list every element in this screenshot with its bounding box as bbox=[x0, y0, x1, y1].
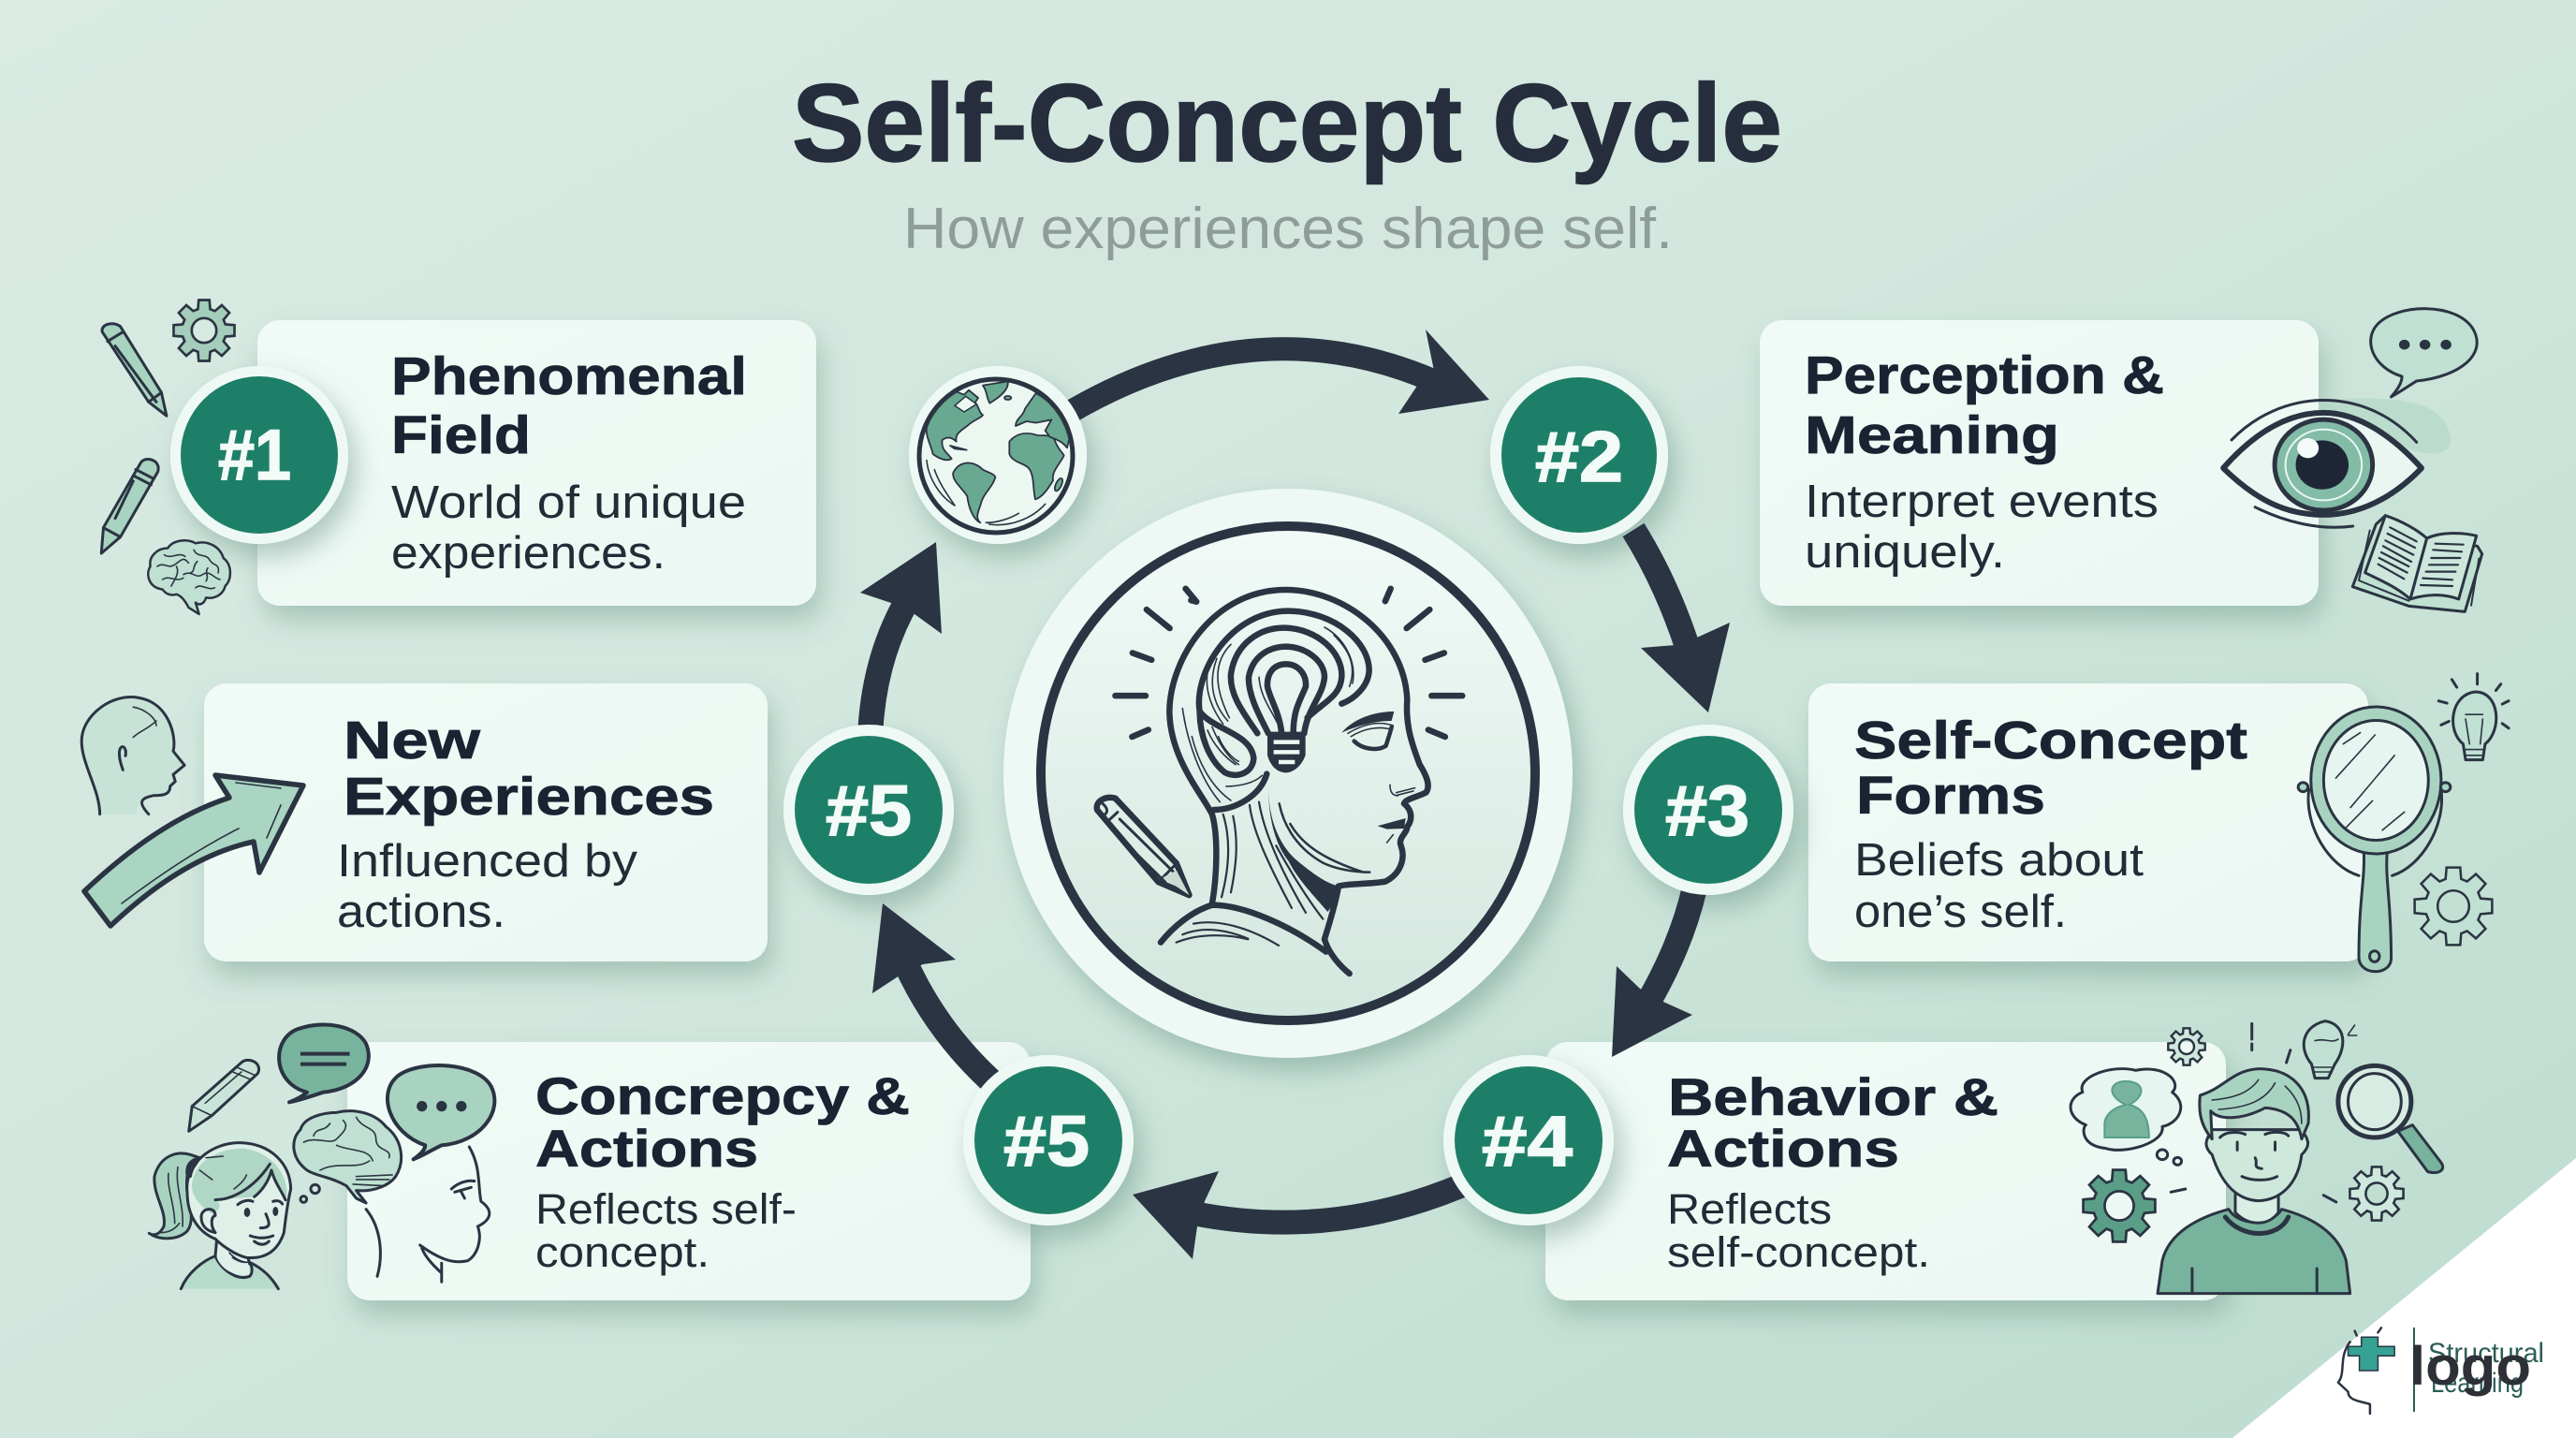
arrow: 4 to 5 bbox=[1133, 1171, 1460, 1259]
heading: new experiences bbox=[344, 711, 714, 827]
icon: continents bbox=[927, 381, 1070, 525]
heading: self-concept forms bbox=[1854, 711, 2247, 826]
badge 2: #2 bbox=[1535, 418, 1623, 497]
icon: head with lightbulb bbox=[1161, 590, 1428, 974]
icon: pencil bbox=[189, 1060, 259, 1131]
logo wordmark: Learning bbox=[2431, 1368, 2524, 1399]
icon: dark gear bbox=[2084, 1170, 2155, 1241]
body: perception and meaning: Interpret events bbox=[1805, 477, 2159, 527]
icon cluster: phenomenal field bbox=[101, 300, 235, 614]
panel: phenomenal field bbox=[257, 320, 816, 606]
icon: pencil two bbox=[101, 459, 158, 553]
subtitle: How experiences shape self. bbox=[903, 197, 1673, 261]
body: concrepcy and actions: concept. bbox=[535, 1228, 710, 1276]
arrow: 5 to globe bbox=[860, 542, 942, 728]
body: concrepcy and actions bbox=[535, 1185, 797, 1276]
badge 1 bbox=[170, 366, 348, 544]
body: perception and meaning bbox=[1805, 477, 2159, 578]
icon: thought cloud bbox=[2071, 1069, 2182, 1165]
heading: phenomenal field: Phenomenal bbox=[391, 346, 747, 406]
globe bbox=[909, 366, 1087, 544]
icon: top gear bbox=[2168, 1028, 2205, 1065]
title: Self-Concept Cycle bbox=[792, 62, 1782, 185]
body: self-concept forms bbox=[1854, 835, 2144, 937]
badge 5 left bbox=[783, 725, 954, 895]
heading: concrepcy and actions: Actions bbox=[535, 1119, 758, 1178]
heading: self-concept forms: Self-Concept bbox=[1854, 711, 2247, 770]
icon: right gear bbox=[2349, 1167, 2404, 1221]
icon: gear bbox=[173, 300, 235, 361]
arrow: globe to 2 bbox=[1067, 330, 1489, 414]
icon cluster: new experiences bbox=[81, 697, 303, 926]
body: self-concept forms: one’s self. bbox=[1854, 887, 2067, 937]
icon: magnifier bbox=[2338, 1065, 2443, 1173]
heading: behavior and actions: Behavior & bbox=[1668, 1067, 1998, 1126]
icon: speech bubble bbox=[2371, 309, 2477, 397]
heading: new experiences: Experiences bbox=[344, 767, 714, 827]
icon cluster: concrepcy and actions bbox=[149, 1024, 494, 1289]
heading: new experiences: New bbox=[344, 711, 481, 770]
icon: head profile bbox=[366, 1147, 490, 1282]
icon cluster: behavior and actions bbox=[2071, 1021, 2443, 1294]
icon: brain bbox=[148, 540, 230, 614]
icon: green arrow bbox=[84, 775, 303, 926]
icon: small gear bbox=[2415, 868, 2492, 945]
badge 5 bottom bbox=[963, 1055, 1134, 1225]
badge 5 left: #5 bbox=[826, 771, 912, 851]
heading: phenomenal field: Field bbox=[391, 405, 531, 465]
body: behavior and actions bbox=[1667, 1185, 1930, 1276]
heading: concrepcy and actions bbox=[535, 1066, 910, 1178]
icon: book bbox=[2352, 516, 2482, 611]
body: concrepcy and actions: Reflects self- bbox=[535, 1185, 797, 1233]
body: behavior and actions: Reflects bbox=[1667, 1185, 1832, 1233]
logo wordmark: logo bbox=[2409, 1336, 2531, 1397]
body: phenomenal field: experiences. bbox=[391, 528, 666, 579]
panel: behavior and actions bbox=[1545, 1042, 2226, 1300]
icon: rays and pencil bbox=[1097, 589, 1462, 895]
white corner triangle bbox=[2232, 1158, 2576, 1438]
body: new experiences bbox=[337, 836, 638, 937]
heading: perception and meaning: Meaning bbox=[1805, 405, 2059, 465]
icon cluster: self-concept forms bbox=[2298, 674, 2509, 972]
body: self-concept forms: Beliefs about bbox=[1854, 835, 2144, 886]
body: phenomenal field bbox=[391, 477, 746, 579]
center medallion bbox=[1003, 489, 1573, 1058]
icon: pencil one bbox=[102, 324, 167, 416]
panel: self-concept forms bbox=[1808, 683, 2368, 961]
heading: perception and meaning bbox=[1805, 345, 2164, 465]
arrow: 5 to 5 bbox=[872, 903, 990, 1080]
arrow: 2 to 3 bbox=[1633, 530, 1730, 712]
icon: brain bbox=[294, 1111, 402, 1203]
badge 3 bbox=[1623, 725, 1793, 895]
arrow: 3 to 4 bbox=[1612, 889, 1694, 1057]
badge 3: #3 bbox=[1665, 771, 1749, 851]
icon: logo head bbox=[2338, 1328, 2394, 1414]
heading: perception and meaning: Perception & bbox=[1805, 345, 2164, 405]
icon: head profile bbox=[81, 697, 184, 814]
badge 2 bbox=[1490, 366, 1668, 544]
heading: behavior and actions bbox=[1667, 1067, 1998, 1178]
icon: boy bbox=[2158, 1023, 2350, 1294]
body: perception and meaning: uniquely. bbox=[1805, 527, 2005, 578]
panel: new experiences bbox=[204, 683, 768, 961]
heading: concrepcy and actions: Concrepcy & bbox=[535, 1066, 910, 1125]
icon: light speech bubble bbox=[388, 1065, 494, 1159]
icon: bulb bbox=[2304, 1021, 2357, 1078]
body: new experiences: Influenced by bbox=[337, 836, 638, 887]
heading: self-concept forms: Forms bbox=[1856, 766, 2045, 826]
badge 4: #4 bbox=[1482, 1102, 1573, 1181]
icon: girl bbox=[149, 1143, 319, 1289]
logo bbox=[2338, 1328, 2544, 1414]
icon cluster: perception and meaning bbox=[2223, 309, 2477, 527]
panel: perception and meaning bbox=[1760, 320, 2319, 606]
badge 4 bbox=[1443, 1055, 1614, 1225]
icon: green speech bubble bbox=[279, 1024, 369, 1102]
panel: concrepcy and actions bbox=[347, 1042, 1031, 1300]
icon: mirror bbox=[2298, 707, 2451, 972]
icon: bulb bbox=[2438, 674, 2509, 760]
badge 1: #1 bbox=[218, 416, 291, 495]
body: new experiences: actions. bbox=[337, 887, 505, 937]
heading: behavior and actions: Actions bbox=[1667, 1119, 1899, 1178]
icon: eye bbox=[2223, 401, 2422, 527]
body: phenomenal field: World of unique bbox=[391, 477, 746, 528]
logo wordmark: Structural bbox=[2428, 1338, 2544, 1369]
badge 5 bottom: #5 bbox=[1003, 1102, 1090, 1181]
body: behavior and actions: self-concept. bbox=[1667, 1228, 1930, 1276]
heading: phenomenal field bbox=[391, 346, 747, 465]
